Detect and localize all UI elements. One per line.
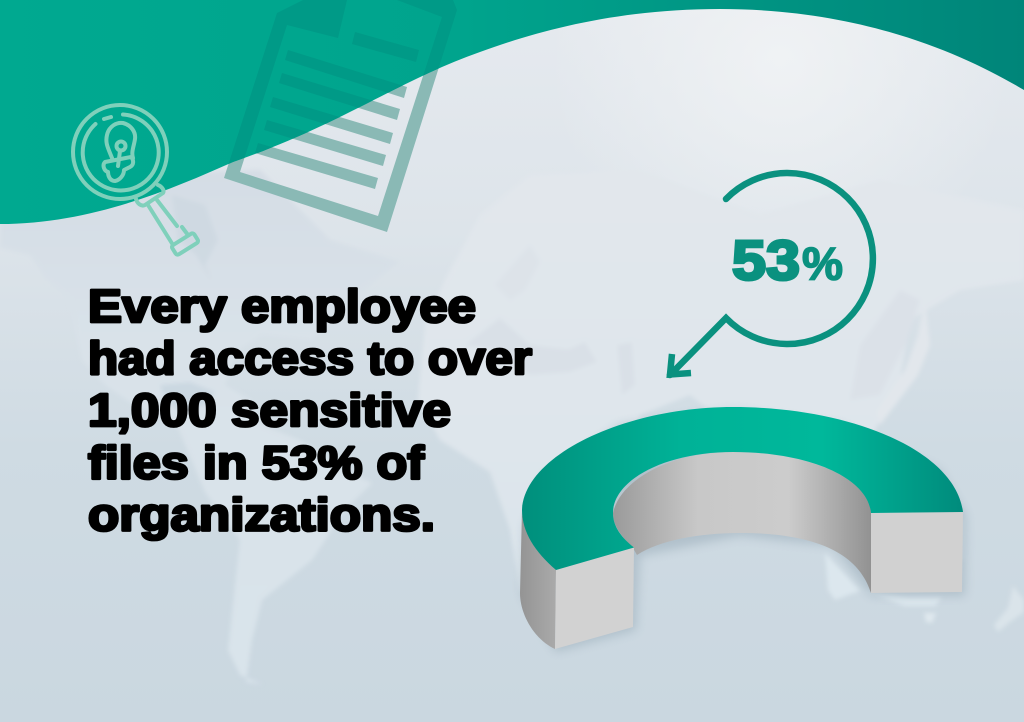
- map: Baltic: [495, 245, 540, 300]
- icon: magnifier with light bulb: [73, 105, 199, 256]
- map: Japan: [876, 300, 930, 425]
- icon: document (over teal wave): [228, 0, 457, 164]
- map: Hudson Bay: [172, 195, 218, 282]
- map: Tasmania: [924, 613, 936, 623]
- map: Americas: [0, 170, 400, 684]
- ring: outer wall: [520, 510, 556, 649]
- map: Australia: [825, 553, 942, 606]
- ring: right end face: [871, 512, 963, 593]
- map: Eurasia and Africa: [418, 170, 1024, 610]
- heading: main statement: files in 53% of: [88, 436, 425, 488]
- ring: left end face: [555, 548, 634, 649]
- ring: top face: [522, 407, 963, 570]
- teal wave header: [0, 0, 1024, 224]
- heading: main statement: 1,000 sensitive: [88, 384, 451, 436]
- map: Black Sea: [555, 342, 597, 372]
- callout: 53%: [732, 228, 843, 292]
- callout: 53%: 53: [732, 228, 800, 292]
- icon: document (on background): [224, 0, 457, 232]
- 3D ring chart: 53% segment: [520, 407, 966, 652]
- world map: [0, 170, 1024, 684]
- map: Caspian Sea: [617, 342, 635, 395]
- heading: main statement: [88, 280, 532, 540]
- callout: 53%: %: [802, 238, 843, 290]
- map: Arabian Gulf: [618, 432, 680, 465]
- heading: main statement: Every employee: [88, 280, 476, 332]
- map: Gulf of Mexico: [160, 382, 215, 412]
- ring: inner wall: [613, 452, 871, 593]
- map: Sea of Japan: [850, 290, 920, 400]
- map: New Zealand: [994, 586, 1024, 632]
- heading: main statement: had access to over: [88, 332, 532, 384]
- circular arrow: [670, 173, 873, 375]
- heading: main statement: organizations.: [88, 488, 435, 540]
- map: Mediterranean: [465, 318, 575, 375]
